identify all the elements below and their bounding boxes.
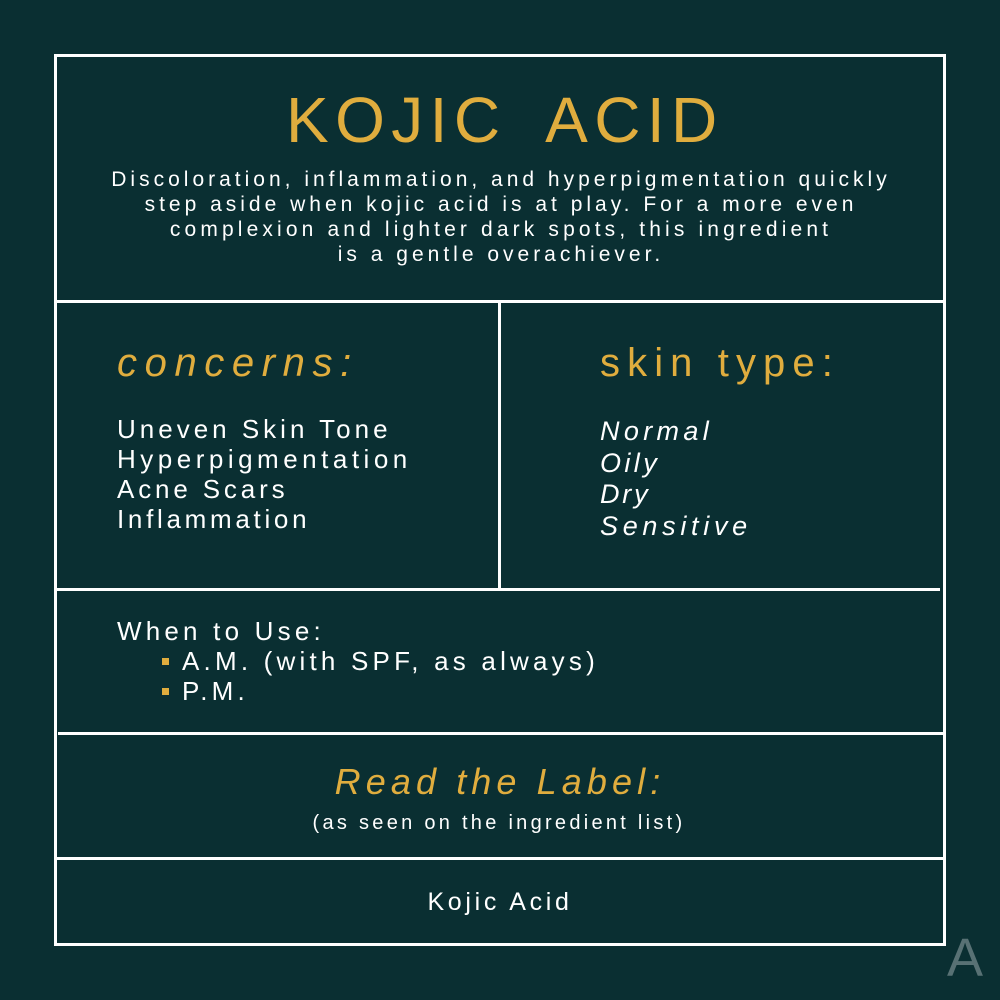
intro text: complexion and lighter dark spots, this ingredient bbox=[170, 218, 832, 241]
concerns list: Acne Scars bbox=[117, 474, 288, 504]
logo: A bbox=[947, 928, 983, 988]
when to use bbox=[117, 616, 599, 706]
ingredient name: Kojic Acid bbox=[427, 888, 573, 916]
concerns list: Hyperpigmentation bbox=[117, 444, 412, 474]
intro text: step aside when kojic acid is at play. For a more even bbox=[145, 193, 857, 216]
bullet: A.M.: A.M. (with SPF, as always) bbox=[182, 646, 599, 676]
skin type heading: skin type: bbox=[600, 341, 840, 385]
read the label subtext: (as seen on the ingredient list) bbox=[313, 812, 685, 834]
concerns list: Inflammation bbox=[117, 504, 310, 534]
concerns list bbox=[117, 414, 412, 534]
concerns heading: concerns: bbox=[117, 341, 359, 385]
skin type list bbox=[600, 416, 752, 541]
skin type list: Oily bbox=[600, 448, 660, 478]
title: KOJIC ACID bbox=[286, 84, 724, 156]
skin type list: Sensitive bbox=[600, 511, 752, 541]
intro text bbox=[111, 168, 891, 266]
skin type list: Dry bbox=[600, 479, 650, 509]
intro text: Discoloration, inflammation, and hyperpigmentation quickly bbox=[111, 168, 891, 191]
concerns list: Uneven Skin Tone bbox=[117, 414, 392, 444]
read the label heading: Read the Label: bbox=[335, 761, 665, 802]
intro text: is a gentle overachiever. bbox=[338, 243, 664, 266]
outer frame bbox=[54, 54, 946, 946]
bullet: P.M.: P.M. bbox=[182, 676, 249, 706]
when to use: When to Use: bbox=[117, 616, 325, 646]
skin type list: Normal bbox=[600, 416, 713, 446]
